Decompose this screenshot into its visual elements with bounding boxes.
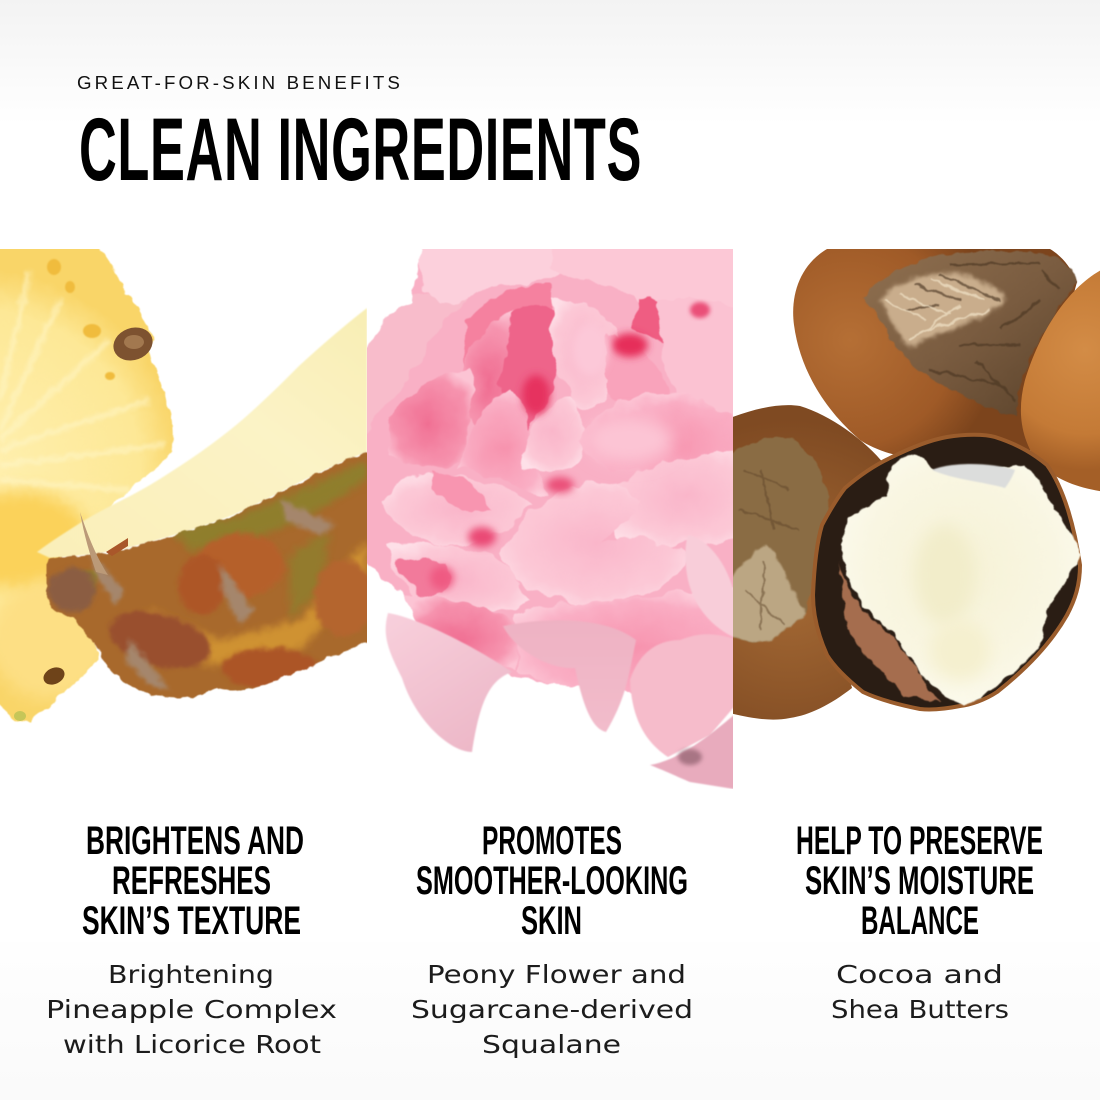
panel: shea nuts image bbox=[720, 249, 1100, 720]
column 3 text: Shea Butters bbox=[831, 995, 1009, 1024]
column 2 text: Peony Flower and bbox=[427, 960, 686, 989]
column 2 heading: PROMOTES bbox=[482, 819, 622, 863]
title: CLEAN INGREDIENTS bbox=[79, 99, 642, 199]
left nut bbox=[733, 405, 881, 720]
pineapple wedge bbox=[36, 308, 367, 700]
column 1 text: Brightening bbox=[108, 960, 274, 989]
column 1 text bbox=[46, 960, 337, 1059]
flower body bbox=[367, 249, 733, 694]
column 1 heading bbox=[82, 819, 304, 943]
column 3 heading bbox=[796, 819, 1043, 943]
pale lower-left petal bbox=[386, 613, 512, 752]
top nut bbox=[793, 249, 1077, 461]
open shell with butter bbox=[813, 435, 1080, 709]
pale right petals bbox=[630, 634, 740, 757]
shea butter bbox=[841, 454, 1080, 707]
column 1 text: with Licorice Root bbox=[63, 1030, 321, 1059]
column 1 heading: BRIGHTENS AND bbox=[86, 819, 304, 863]
column 1 heading: SKIN’S TEXTURE bbox=[82, 899, 301, 943]
column 2 heading: SMOOTHER-LOOKING bbox=[416, 859, 688, 903]
column 2 text: Squalane bbox=[482, 1030, 621, 1059]
panel: peony image bbox=[367, 249, 733, 789]
eyebrow heading: GREAT-FOR-SKIN BENEFITS bbox=[77, 73, 403, 93]
column 2 text: Sugarcane-derived bbox=[411, 995, 693, 1024]
column 2 text bbox=[411, 960, 693, 1059]
column 2 heading: SKIN bbox=[521, 899, 582, 943]
pineapple slice bbox=[0, 249, 174, 724]
peony flower bbox=[367, 249, 733, 789]
column 3 text: Cocoa and bbox=[836, 960, 1003, 989]
column 3 heading: BALANCE bbox=[861, 899, 979, 943]
right nut bbox=[1021, 268, 1100, 492]
pale centre petal bbox=[503, 620, 636, 732]
panel: pineapple image bbox=[0, 249, 367, 724]
column 2 heading bbox=[416, 819, 688, 943]
column 3 text bbox=[831, 960, 1009, 1024]
column 1 text: Pineapple Complex bbox=[46, 995, 337, 1024]
column 1 heading: REFRESHES bbox=[112, 859, 271, 903]
soft fold shadows bbox=[430, 302, 710, 590]
